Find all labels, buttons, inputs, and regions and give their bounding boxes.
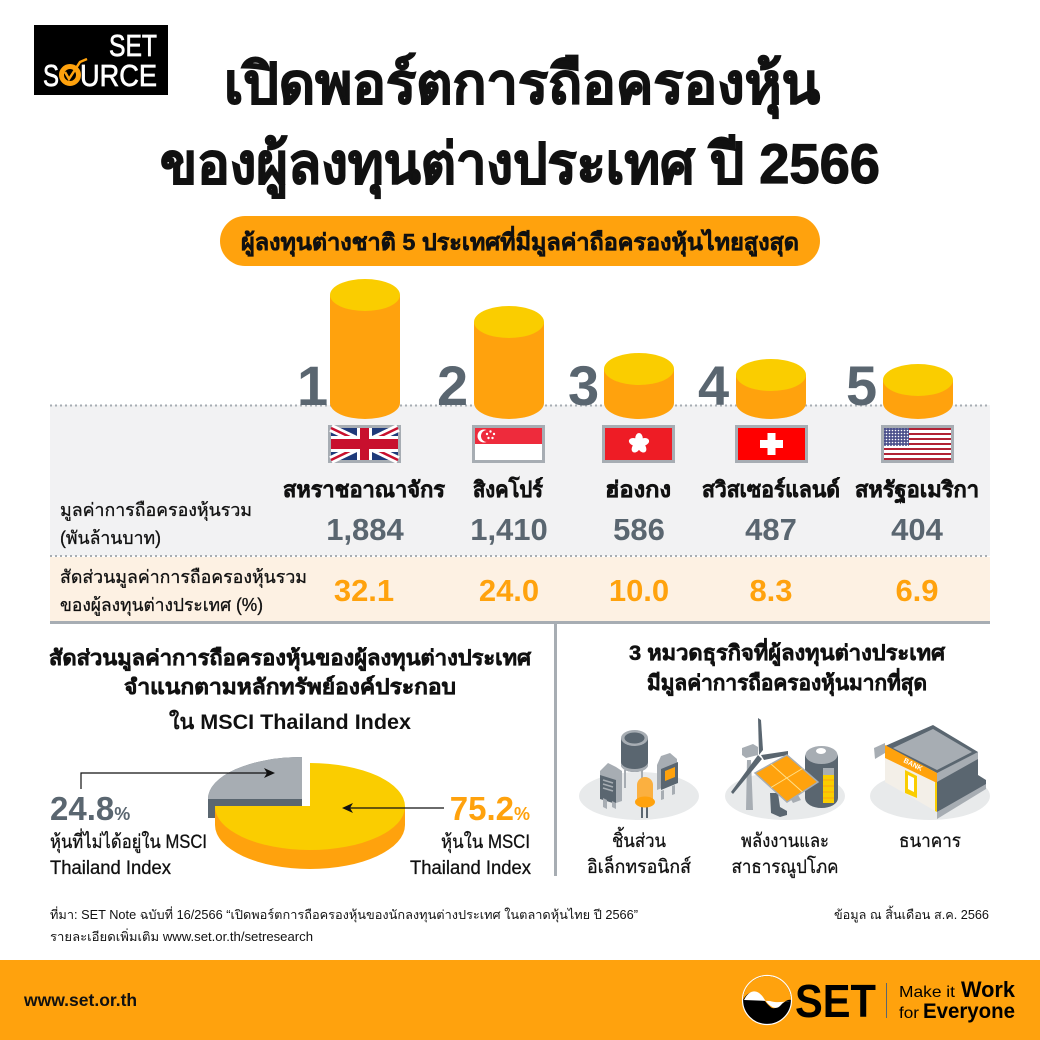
row label: share: สัดส่วนมูลค่าการถือครองหุ้นรวม: [60, 567, 307, 588]
heading: top 3 sectors: 3 หมวดธุรกิจที่ผู้ลงทุนต่างประเทศ: [629, 637, 946, 667]
title: [160, 52, 880, 199]
title: ของผู้ลงทุนต่างประเทศ ปี 2566: [160, 132, 880, 199]
flag: UK: [330, 426, 400, 462]
callout: 24.8%: 24.8%: [50, 790, 130, 827]
source note: ที่มา: SET Note ฉบับที่ 16/2566 “เปิดพอร์ตการถือครองหุ้นของนักลงทุนต่างประเทศ ในตลาดหุ้นไทย ปี 2566”: [50, 906, 638, 923]
cylinder: USA: [883, 364, 953, 419]
sector labels: [587, 827, 961, 878]
rank numbers: 3: [568, 354, 599, 417]
icon: electronic components: [579, 730, 699, 820]
heading: top 3 sectors: มีมูลค่าการถือครองหุ้นมากที่สุด: [647, 667, 927, 697]
callout: 75.2%: 75.2%: [450, 790, 530, 827]
cylinder: Switzerland: [736, 359, 806, 419]
country names: สหราชอาณาจักร: [283, 477, 445, 502]
flag: Switzerland: [736, 426, 806, 462]
rank numbers: 4: [698, 354, 729, 417]
heading: MSCI share: ใน MSCI Thailand Index: [169, 709, 411, 734]
logo: SET Source: URCE: [80, 58, 157, 93]
values row: 1,884: [326, 512, 405, 547]
country names: ฮ่องกง: [605, 477, 671, 502]
share row: 8.3: [749, 573, 793, 608]
heading: top 3 sectors: [629, 637, 946, 697]
sector labels: ธนาคาร: [899, 831, 961, 852]
sector labels: ชิ้นส่วน: [612, 827, 666, 852]
values row: 586: [613, 512, 665, 547]
footer band: [0, 960, 1040, 1040]
row label: share: ของผู้ลงทุนต่างประเทศ (%): [60, 595, 263, 616]
footer logo: SET: [742, 975, 887, 1027]
country names: สิงคโปร์: [473, 476, 543, 502]
footer slogan: [899, 977, 1016, 1023]
flag: Hong Kong: [604, 426, 674, 462]
share row: [334, 573, 939, 608]
callout: 75.2%: [410, 790, 531, 879]
source note: [50, 906, 638, 944]
heading: MSCI share: จำแนกตามหลักทรัพย์องค์ประกอบ: [124, 675, 456, 699]
country names: สหรัฐอเมริกา: [855, 477, 979, 504]
logo: SET Source: SET: [109, 28, 157, 63]
footer slogan: for: [899, 1005, 920, 1022]
row label: total value: มูลค่าการถือครองหุ้นรวม: [60, 500, 252, 521]
rank numbers: 2: [437, 354, 468, 417]
callout: 24.8%: Thailand Index: [50, 858, 171, 879]
source note: รายละเอียดเพิ่มเติม www.set.or.th/setresearch: [50, 928, 313, 944]
icon: bank: [870, 725, 990, 820]
flag: USA: [882, 426, 952, 462]
footer band: www.set.or.th: [23, 990, 137, 1010]
share row: 32.1: [334, 573, 394, 608]
callout: 75.2%: หุ้นใน MSCI: [441, 831, 530, 854]
icon: bank: BANK: [902, 758, 923, 773]
logo: SET Source: S: [43, 58, 59, 93]
data date note: ข้อมูล ณ สิ้นเดือน ส.ค. 2566: [834, 905, 989, 923]
pie chart: [208, 757, 405, 869]
rank numbers: 5: [846, 354, 877, 417]
country names: สวิสเซอร์แลนด์: [702, 477, 840, 502]
heading: MSCI share: [49, 646, 532, 734]
row label: total value: (พันล้านบาท): [60, 528, 161, 548]
arrow: to grey slice: [81, 768, 275, 789]
share row: 10.0: [609, 573, 669, 608]
callout: 75.2%: Thailand Index: [410, 858, 531, 879]
arrow: to yellow slice: [342, 803, 444, 813]
footer slogan: Everyone: [923, 1000, 1015, 1023]
logo: SET Source: [34, 25, 168, 95]
title: เปิดพอร์ตการถือครองหุ้น: [224, 52, 820, 119]
sector labels: สาธารณูปโภค: [732, 855, 838, 878]
values row: 404: [891, 512, 944, 547]
row label: share: [60, 567, 307, 616]
values row: 1,410: [470, 512, 548, 547]
sector labels: พลังงานและ: [741, 831, 829, 852]
heading: MSCI share: สัดส่วนมูลค่าการถือครองหุ้นของผู้ลงทุนต่างประเทศ: [49, 646, 532, 672]
subtitle pill: [220, 216, 820, 266]
row label: total value: [60, 500, 252, 548]
country names: [283, 476, 979, 504]
share row: 24.0: [479, 573, 539, 608]
sector labels: อิเล็กทรอนิกส์: [587, 854, 691, 878]
rank numbers: 1: [297, 354, 328, 417]
flag: Singapore: [474, 426, 544, 462]
table bands: [50, 405, 990, 624]
cylinder: Singapore: [474, 306, 544, 419]
footer logo: SET: SET: [795, 975, 876, 1027]
cylinder: Hong Kong: [604, 353, 674, 419]
share row: 6.9: [895, 573, 939, 608]
divider: [554, 622, 557, 876]
footer slogan: Work: [961, 977, 1016, 1002]
subtitle pill: ผู้ลงทุนต่างชาติ 5 ประเทศที่มีมูลค่าถือครองหุ้นไทยสูงสุด: [241, 225, 799, 257]
icon: energy and utilities: [725, 718, 845, 820]
callout: 24.8%: [50, 790, 207, 879]
cylinder: United Kingdom: [330, 279, 400, 419]
rank numbers: [297, 354, 877, 417]
values row: [326, 512, 944, 547]
footer slogan: Make it: [899, 984, 956, 1001]
callout: 24.8%: หุ้นที่ไม่ได้อยู่ใน MSCI: [50, 828, 207, 854]
values row: 487: [745, 512, 797, 547]
